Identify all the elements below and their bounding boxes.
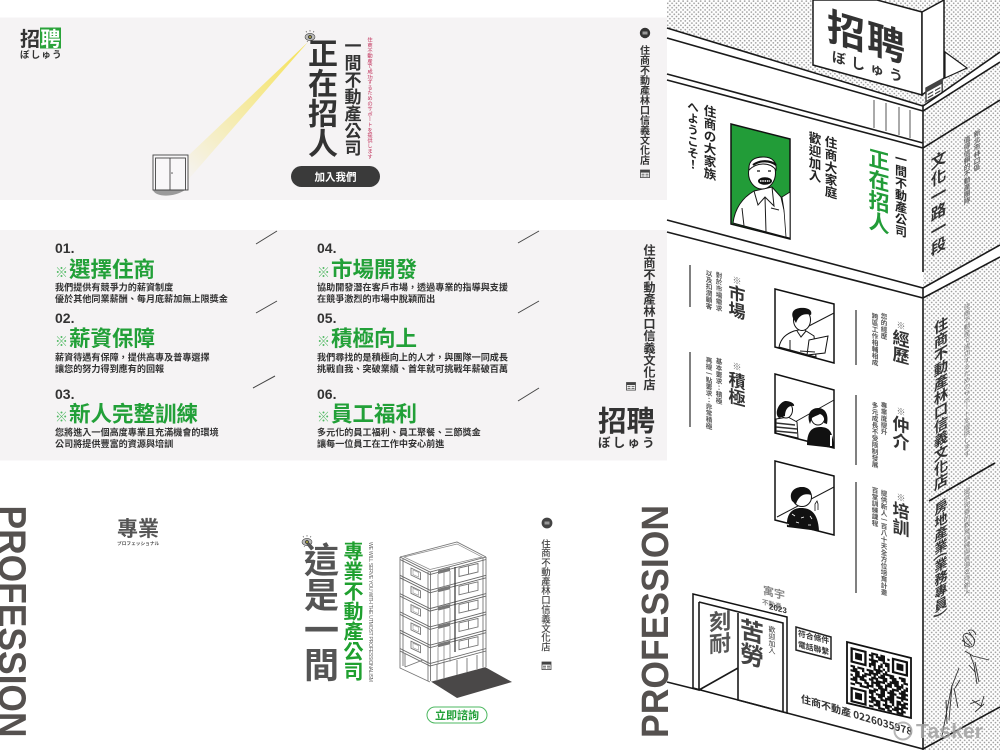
icon: eye [302, 535, 312, 547]
item 05 [317, 310, 508, 375]
logo: recruiting mark: ぼしゅう [20, 47, 63, 61]
light beam [187, 42, 308, 181]
right wall small gray text: 新北市林口區 [972, 127, 982, 174]
column: brokerage: 仲介 [889, 413, 913, 453]
headline: a real estate company: 一間不動產公司 [340, 37, 366, 157]
column: market: 以及扣潤顧客 [704, 269, 714, 312]
right wall small gray text: 值得信賴的不動產團隊 [962, 133, 972, 208]
label: professional: 專業 [117, 513, 159, 543]
item 01: ※ [55, 262, 68, 281]
wall text: a real estate company: 一間不動產公司 [892, 151, 910, 240]
logo: recruiting mark: 招 [20, 23, 40, 52]
wall text: welcome family [685, 99, 719, 184]
item 04: 市場開發 [331, 253, 417, 284]
wall text: now hiring green: 正在招人 [864, 145, 894, 237]
illustration: building street scene [667, 0, 1000, 750]
item 04: 在競爭激烈的市場中脫穎而出 [317, 291, 435, 305]
item 04: 協助開發潛在客戶市場，透過專業的指導與支援 [317, 280, 508, 294]
store name column: 住商不動產林口信義文化店 [640, 243, 658, 391]
roof sign [813, 0, 967, 102]
sign: call for conditions: 符合條件 [798, 628, 829, 647]
wall text: join the family: 歡迎加入 [806, 129, 824, 186]
item 02: 讓您的努力得到應有的回報 [55, 361, 164, 375]
column: market: ※ [730, 274, 744, 287]
item 06 [317, 386, 481, 450]
button: join us: 加入我們 [314, 170, 356, 184]
watermark: Tasker [916, 721, 983, 743]
right wall small gray text: 提供完善的教育訓練與資源支持新人 [962, 485, 972, 598]
item 03 [55, 386, 219, 450]
column: experience: 您的經歷 [879, 311, 889, 342]
year sign above door [762, 582, 787, 616]
item 02 [55, 310, 210, 375]
doorway: 刻耐 [704, 608, 736, 656]
logo: recruiting mark [20, 23, 63, 61]
item 01: 01. [55, 240, 74, 256]
right wall text: store name: 住商不動產林口信義文化店 [931, 312, 951, 494]
wall text: join the family [806, 129, 840, 202]
doorway [693, 594, 787, 713]
item 03: 您將進入一個高度專業且充滿機會的環境 [55, 424, 219, 438]
illustration: isometric building [400, 542, 512, 698]
halftone sky and wall [667, 0, 1000, 750]
item 03: 03. [55, 386, 74, 402]
item 05: 積極向上 [331, 322, 417, 353]
column: proactive [690, 352, 749, 431]
column: training: 培訓 [889, 498, 913, 540]
column: experience [856, 310, 913, 368]
logo: recruiting mark: 聘 [40, 23, 60, 52]
doorway: 苦勞 [735, 615, 769, 671]
wall text: join the family: 住商大家庭 [822, 133, 840, 202]
tagline in English: WE WILL SERVE YOU WITH THE UTMOST PROFESSIONALISM [367, 542, 373, 682]
column: experience: 跨區工作相輔相成 [870, 311, 880, 368]
column: market [690, 265, 749, 323]
item 06: 06. [317, 386, 336, 402]
item 05: 05. [317, 310, 336, 326]
column: brokerage [856, 395, 913, 470]
column: market: 市場 [725, 281, 749, 323]
item 06: 員工福利 [331, 398, 417, 428]
tagline in pink: 住商不動産で成功するためのサポートを提供します [366, 36, 374, 159]
item 01: 優於其他同業薪酬、每月底薪加無上限獎金 [55, 291, 228, 305]
window: woman in floral shirt [775, 461, 834, 535]
column: experience: ※ [894, 319, 908, 332]
right wall small gray text: 住商不動産で成功するためのサポートを提供します [962, 300, 972, 460]
item 04: ※ [317, 262, 330, 281]
column: proactive: 再提一點要求：非常積極 [704, 356, 714, 431]
column: training: 提供新人一百八十天全方位培育計畫 [879, 488, 889, 597]
ground floor [405, 653, 477, 681]
column: proactive: 基本要求：積極 [714, 356, 724, 406]
right wall text: job title: 房地產業(業務專員) [931, 494, 951, 621]
item 06: 讓每一位員工在工作中安心前進 [317, 436, 444, 450]
column: proactive: 積極 [725, 369, 749, 409]
store name column: 住商不動產林口信義文化店 [638, 44, 652, 166]
item 02: 薪資待遇有保障，提供高專及普專選擇 [55, 350, 210, 364]
column: brokerage: ※ [894, 405, 908, 418]
headline: now hiring: 正在招人 [301, 38, 345, 158]
sketch: walking figure on wall [942, 630, 989, 736]
item 02: 薪資保障 [69, 322, 155, 353]
item 03: 新人完整訓練 [69, 398, 198, 428]
item 05: ※ [317, 331, 330, 350]
wall text: welcome family: 住商の大家族 [701, 102, 719, 184]
logo: recruiting: 招聘 [598, 399, 655, 440]
logo: recruiting: ぼしゅう [598, 432, 657, 451]
doorway: 歡迎加入 [767, 624, 777, 656]
icon: eye [305, 30, 315, 42]
year sign above door: 不動產 [762, 596, 782, 611]
column: training: ※ [894, 491, 908, 504]
sign: call for conditions: 電話聯繫 [798, 639, 829, 658]
roof sign: ぼしゅう [832, 45, 908, 89]
item 01: 我們提供有競爭力的薪資制度 [55, 280, 173, 294]
right vertical word: PROFESSION: PROFESSION [635, 505, 677, 738]
item 04 [317, 240, 508, 305]
building ground shadow [430, 667, 512, 698]
column: market: 對於市場需求 [714, 270, 724, 314]
small logo [626, 382, 636, 390]
item 03: 公司將提供豐富的資源與培訓 [55, 436, 173, 450]
window: man with laptop [775, 289, 834, 363]
headline: this is a: 這是一間 [296, 542, 347, 682]
year sign above door: 寓宇 [763, 582, 785, 603]
column: experience: 經歷 [889, 326, 913, 368]
button: consult now: 立即諮詢 [435, 707, 479, 723]
column: proactive: ※ [730, 360, 744, 373]
column: brokerage: 多元成長不受限制發展 [870, 400, 880, 470]
window: two women [775, 374, 834, 448]
panel: recruiting banner [0, 18, 667, 200]
window: green with smiling man [731, 124, 790, 239]
item 02: 02. [55, 310, 74, 326]
item 02: ※ [55, 331, 68, 350]
right wall text: road name: 文化一路一段 [927, 144, 950, 262]
column: brokerage: 專業度提升 [879, 400, 889, 437]
headline: professional real estate company: 專業不動產公司 [339, 541, 368, 681]
item 01 [55, 240, 228, 305]
QR code [847, 642, 911, 718]
item 05: 我們尋找的是積極向上的人才，與團隊一同成長 [317, 350, 508, 364]
column: training: 百堂訓練課程 [870, 486, 880, 529]
panel: six benefits [0, 230, 667, 460]
store name column: 住商不動產林口信義文化店 [539, 538, 553, 653]
year sign above door: 2023 [769, 602, 787, 616]
item 06: 多元化的員工福利、員工聚餐、三節獎金 [317, 424, 481, 438]
item 05: 挑戰自我、突破業績、首年就可挑戰年薪破百萬 [317, 361, 508, 375]
button: join us [291, 166, 380, 187]
item 03: ※ [55, 406, 68, 426]
column: training [856, 482, 913, 597]
item 04: 04. [317, 240, 336, 256]
wall text: welcome family: へようこそ！ [685, 99, 701, 172]
label: professional: プロフェッショナル [117, 540, 160, 547]
wall outlines [667, 28, 1000, 750]
sign: call for conditions [796, 627, 831, 659]
phone number: 住商不動產 0226035978 [801, 690, 912, 738]
item 01: 選擇住商 [69, 253, 155, 284]
item 06: ※ [317, 406, 330, 426]
icon: door [153, 155, 188, 196]
right wall small gray text [962, 127, 982, 598]
